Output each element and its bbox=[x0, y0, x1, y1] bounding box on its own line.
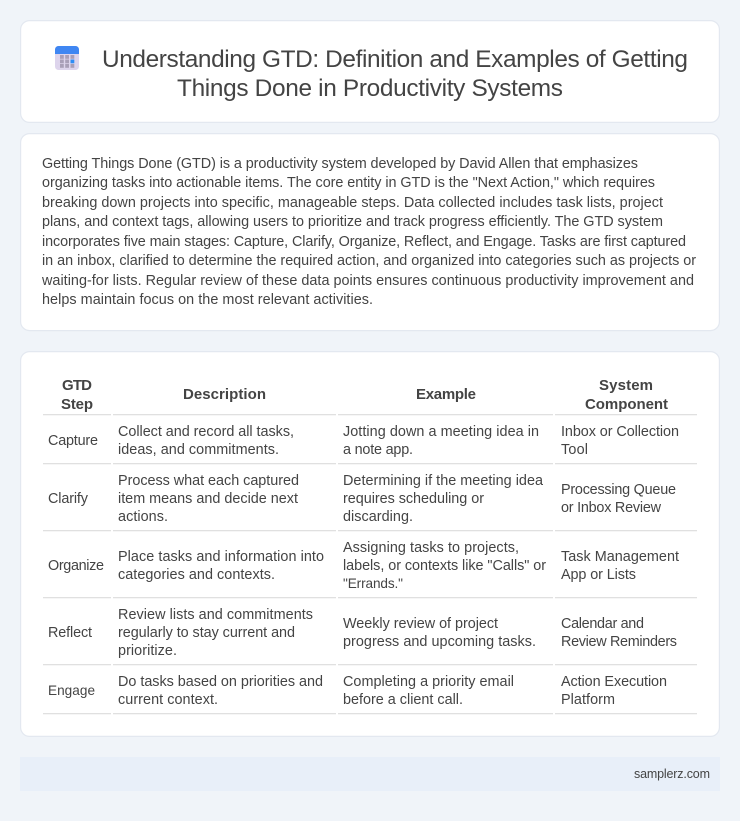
table row: Clarify bbox=[43, 473, 697, 531]
footer bar bbox=[20, 757, 720, 791]
table row: Organize: Assigning tasks to projects, bbox=[343, 540, 519, 556]
table row: Reflect: regularly to stay current and bbox=[118, 625, 295, 641]
panel: GTD steps table bbox=[21, 352, 719, 736]
table row: Organize bbox=[43, 540, 697, 598]
table row: Clarify: actions. bbox=[118, 509, 168, 525]
table row: Capture: Inbox or Collection bbox=[561, 424, 679, 440]
table row: Engage: Engage bbox=[48, 683, 95, 698]
table header row: System bbox=[599, 377, 653, 394]
table row: Organize: Organize bbox=[48, 558, 104, 574]
text block: GTD overview paragraph: waiting-for lists. Regular review of these data points ensures continuous productivity improvement and bbox=[41, 273, 694, 289]
table row: Engage: Completing a priority email bbox=[343, 674, 514, 690]
table row: Organize: "Errands." bbox=[343, 576, 403, 591]
table row: Capture bbox=[43, 424, 697, 464]
panel: title header bbox=[21, 21, 719, 122]
table row: Reflect: Calendar and bbox=[561, 616, 644, 632]
table header row: Description bbox=[183, 386, 266, 403]
table row: Reflect: Review Reminders bbox=[561, 634, 677, 650]
text block: GTD overview paragraph: breaking down projects into specific, manageable steps. Data collected includes task lists, project bbox=[42, 195, 663, 211]
table header row bbox=[43, 377, 697, 415]
table row: Capture: Jotting down a meeting idea in bbox=[343, 424, 539, 440]
table row: Engage bbox=[43, 674, 697, 714]
table row: Clarify: requires scheduling or bbox=[343, 491, 484, 507]
table row: Capture: Tool bbox=[561, 442, 588, 458]
table row: Engage: Action Execution bbox=[561, 674, 667, 690]
table row: Engage: Platform bbox=[561, 692, 615, 708]
table row: Reflect: progress and upcoming tasks. bbox=[343, 634, 536, 650]
table row: Organize: Place tasks and information into bbox=[118, 549, 324, 565]
title: Understanding GTD: Definition and Examples of Getting bbox=[102, 46, 688, 73]
table row: Clarify: Determining if the meeting idea bbox=[343, 473, 543, 489]
table row: Reflect: Review lists and commitments bbox=[118, 607, 313, 623]
text block: GTD overview paragraph: in an inbox, clarified to determine the required action, and organized into categories such as projects or bbox=[42, 253, 696, 269]
table row: Reflect: prioritize. bbox=[118, 643, 177, 659]
text block: GTD overview paragraph: helps maintain focus on the most relevant activities. bbox=[42, 292, 373, 308]
text block: GTD overview paragraph: Getting Things Done (GTD) is a productivity system developed by David Allen that emphasizes bbox=[42, 156, 638, 172]
table row: Organize: Task Management bbox=[561, 549, 679, 565]
text block: GTD overview paragraph: incorporates five main stages: Capture, Clarify, Organize, Reflect, and Engage. Tasks are first captured bbox=[42, 234, 686, 250]
table row: Organize: labels, or contexts like "Calls" or bbox=[343, 558, 546, 574]
table row: Clarify: discarding. bbox=[343, 509, 413, 525]
title bbox=[102, 46, 688, 102]
table row: Reflect: Weekly review of project bbox=[343, 616, 498, 632]
table row: Reflect bbox=[43, 607, 697, 665]
table row: Capture: ideas, and commitments. bbox=[118, 442, 279, 458]
text block: GTD overview paragraph: organizing tasks into actionable items. The core entity in GTD is the "Next Action," which requires bbox=[42, 175, 655, 191]
icon: calendar bbox=[55, 46, 79, 70]
table row: Clarify: Processing Queue bbox=[561, 482, 676, 498]
table row: Organize: categories and contexts. bbox=[118, 567, 275, 583]
table header row: Component bbox=[585, 396, 668, 413]
title: Things Done in Productivity Systems bbox=[177, 75, 563, 102]
table row: Engage: before a client call. bbox=[343, 692, 463, 708]
table header row: Step bbox=[61, 396, 93, 413]
table header row: GTD bbox=[62, 377, 92, 394]
table row: Capture: Collect and record all tasks, bbox=[118, 424, 294, 440]
panel: introduction bbox=[21, 134, 719, 331]
table row: Clarify: Clarify bbox=[48, 491, 89, 507]
table header row: Example bbox=[416, 386, 476, 403]
table row: Capture: Capture bbox=[48, 433, 98, 449]
table row: Clarify: Process what each captured bbox=[118, 473, 299, 489]
table row: Engage: Do tasks based on priorities and bbox=[118, 674, 323, 690]
table row: Reflect: Reflect bbox=[48, 625, 92, 641]
table row: Engage: current context. bbox=[118, 692, 218, 708]
footer source text: samplerz.com bbox=[634, 767, 710, 781]
text block: GTD overview paragraph bbox=[41, 156, 696, 308]
text block: GTD overview paragraph: plans, and context tags, allowing users to prioritize and track progress efficiently. The GTD system bbox=[42, 214, 663, 230]
table row: Organize: App or Lists bbox=[561, 567, 636, 583]
table row: Clarify: or Inbox Review bbox=[561, 500, 662, 516]
table row: Clarify: item means and decide next bbox=[118, 491, 298, 507]
table row: Capture: a note app. bbox=[343, 442, 413, 458]
